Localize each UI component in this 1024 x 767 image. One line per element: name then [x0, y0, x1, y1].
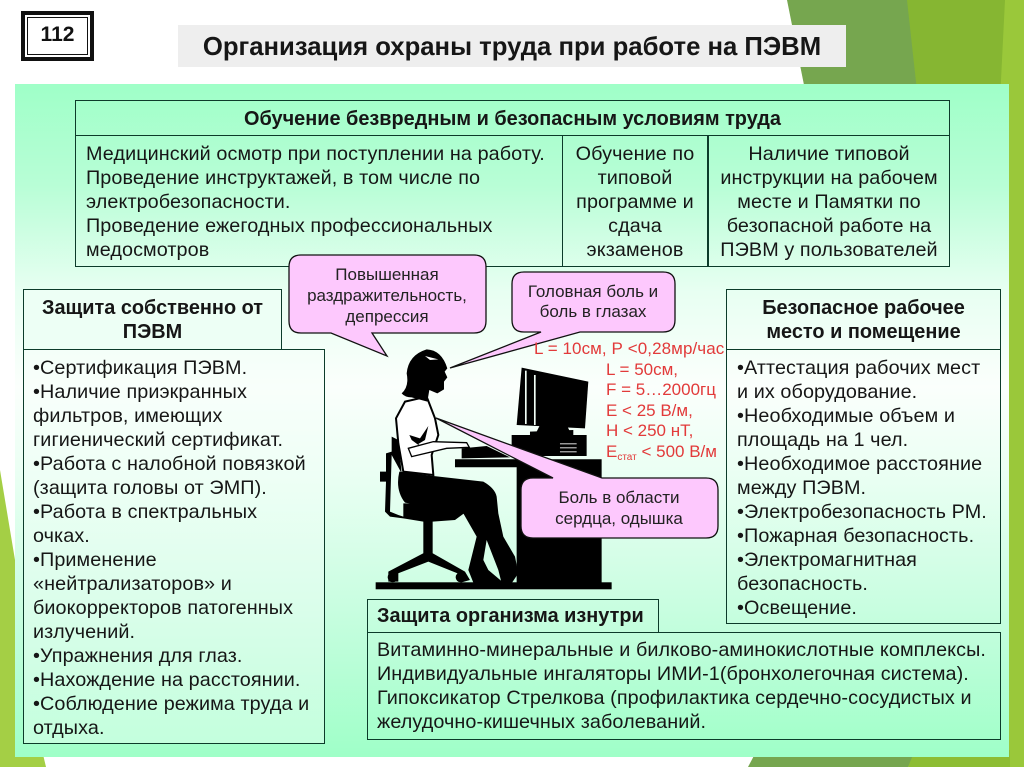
hands on keyboard — [462, 446, 510, 458]
callout: heart pain: сердца, одышка — [555, 509, 683, 528]
arm — [408, 442, 469, 457]
callout: irritability: депрессия — [345, 307, 429, 326]
panel: PC protection list: •Соблюдение режима труда и — [33, 693, 309, 715]
panel: PC protection list: •Нахождение на расстоянии. — [33, 669, 301, 691]
page number badge — [21, 11, 94, 61]
callout: irritability: Повышенная — [335, 265, 439, 284]
heading: PC protection: ПЭВМ — [123, 321, 182, 343]
radiation norms: стат — [617, 452, 637, 463]
panel: PC protection list: (защита головы от ЭМП). — [33, 477, 267, 499]
radiation norms: L = 10см, Р <0,28мр/час — [534, 339, 725, 358]
panel: programme training — [562, 135, 708, 267]
panel: PC protection list: биокорректоров патогенных — [33, 597, 293, 619]
panel: PC protection list: фильтров, имеющих — [33, 405, 222, 427]
panel: instructions: месте и Памятки по — [737, 191, 921, 213]
callout: headache: Головная боль и — [528, 282, 658, 301]
panel: medical checks: электробезопасности. — [86, 191, 290, 213]
panel: programme training: типовой — [598, 167, 672, 189]
heading: PC protection — [23, 289, 282, 350]
callout: heart pain — [436, 418, 718, 538]
panel: PC protection list: •Упражнения для глаз. — [33, 645, 243, 667]
callout: heart pain: Боль в области — [558, 488, 680, 507]
heading: internal protection: Защита организма изнутри — [377, 605, 644, 627]
radiation norms: F = 5…2000гц — [606, 380, 716, 399]
panel: PC protection list — [23, 349, 325, 744]
heading: internal protection — [367, 599, 659, 633]
panel: instructions: инструкции на рабочем — [720, 167, 938, 189]
heading: safe workplace — [726, 289, 1001, 350]
title — [178, 25, 846, 67]
panel: instructions: Наличие типовой — [748, 143, 910, 165]
panel: safe workplace list: между ПЭВМ. — [737, 477, 866, 499]
radiation norms: H < 250 нТ, — [606, 421, 693, 440]
radiation norms: L = 50см, — [606, 360, 678, 379]
panel: PC protection list: «нейтрализаторов» и — [33, 573, 232, 595]
panel: medical checks: Медицинский осмотр при поступлении на работу. — [86, 143, 545, 165]
blouse — [396, 397, 438, 475]
panel: PC protection list: •Наличие приэкранных — [33, 381, 247, 403]
panel: safe workplace list: и их оборудование. — [737, 381, 917, 403]
panel: programme training: программе и — [576, 191, 694, 213]
title: Организация охраны труда при работе на ПЭВМ — [203, 33, 821, 61]
panel: safe workplace list: •Аттестация рабочих мест — [737, 357, 980, 379]
panel: safe workplace list: •Необходимое расстояние — [737, 453, 982, 475]
callout: headache: боль в глазах — [540, 302, 647, 321]
panel: internal protection list: Гипоксикатор Стрелкова (профилактика сердечно-сосудистых и — [377, 687, 972, 709]
panel: PC protection list: отдыха. — [33, 717, 105, 739]
panel: PC protection list: •Работа в спектральных — [33, 501, 257, 523]
panel: PC protection list: •Работа с налобной повязкой — [33, 453, 306, 475]
radiation norms: < 500 В/м — [637, 442, 717, 461]
panel: safe workplace list: безопасность. — [737, 573, 868, 595]
callout: headache — [450, 272, 675, 368]
heading: training — [75, 100, 950, 136]
heading: training: Обучение безвредным и безопасным условиям труда — [244, 108, 781, 130]
panel: medical checks: Проведение ежегодных профессиональных — [86, 215, 492, 237]
panel: safe workplace list — [726, 349, 1001, 624]
panel: internal protection list: Индивидуальные ингаляторы ИМИ-1(бронхолегочная система). — [377, 663, 969, 685]
panel: medical checks: медосмотров — [86, 239, 209, 261]
skirt and legs — [398, 472, 518, 583]
panel: internal protection list: Витаминно-минеральные и билково-аминокислотные комплексы. — [377, 639, 986, 661]
panel: safe workplace list: •Пожарная безопасность. — [737, 525, 974, 547]
panel: internal protection list — [367, 632, 1001, 740]
panel: programme training: сдача — [608, 215, 662, 237]
panel: PC protection list: очках. — [33, 525, 90, 547]
panel: medical checks: Проведение инструктажей, в том числе по — [86, 167, 480, 189]
radiation norms: E < 25 В/м, — [606, 401, 693, 420]
radiation norms: E — [606, 442, 617, 461]
panel: safe workplace list: •Электробезопасность РМ. — [737, 501, 987, 523]
floor, desk and computer — [376, 368, 612, 589]
panel: instructions — [708, 135, 950, 267]
panel: safe workplace list: площадь на 1 чел. — [737, 429, 908, 451]
panel: PC protection list: •Сертификация ПЭВМ. — [33, 357, 247, 379]
panel: medical checks — [75, 135, 563, 267]
heading: PC protection: Защита собственно от — [42, 297, 263, 319]
heading: safe workplace: Безопасное рабочее — [762, 297, 965, 319]
panel: PC protection list: излучений. — [33, 621, 135, 643]
panel: safe workplace list: •Освещение. — [737, 597, 857, 619]
page number badge: 112 — [41, 23, 74, 46]
panel: safe workplace list: •Необходимые объем и — [737, 405, 955, 427]
panel: PC protection list: гигиенический сертификат. — [33, 429, 283, 451]
heading: safe workplace: место и помещение — [766, 321, 961, 343]
head and hair — [402, 349, 447, 402]
radiation norms — [534, 339, 725, 463]
callout: irritability: раздражительность, — [307, 286, 467, 305]
chair — [380, 437, 470, 583]
panel: instructions: безопасной работе на — [727, 215, 931, 237]
callout: irritability — [289, 255, 486, 356]
panel: programme training: Обучение по — [576, 143, 694, 165]
panel: programme training: экзаменов — [587, 239, 683, 261]
panel: safe workplace list: •Электромагнитная — [737, 549, 917, 571]
woman and chair — [380, 349, 518, 583]
panel: PC protection list: •Применение — [33, 549, 157, 571]
panel: instructions: ПЭВМ у пользователей — [720, 239, 938, 261]
panel: internal protection list: желудочно-кишечных заболеваний. — [377, 711, 706, 733]
